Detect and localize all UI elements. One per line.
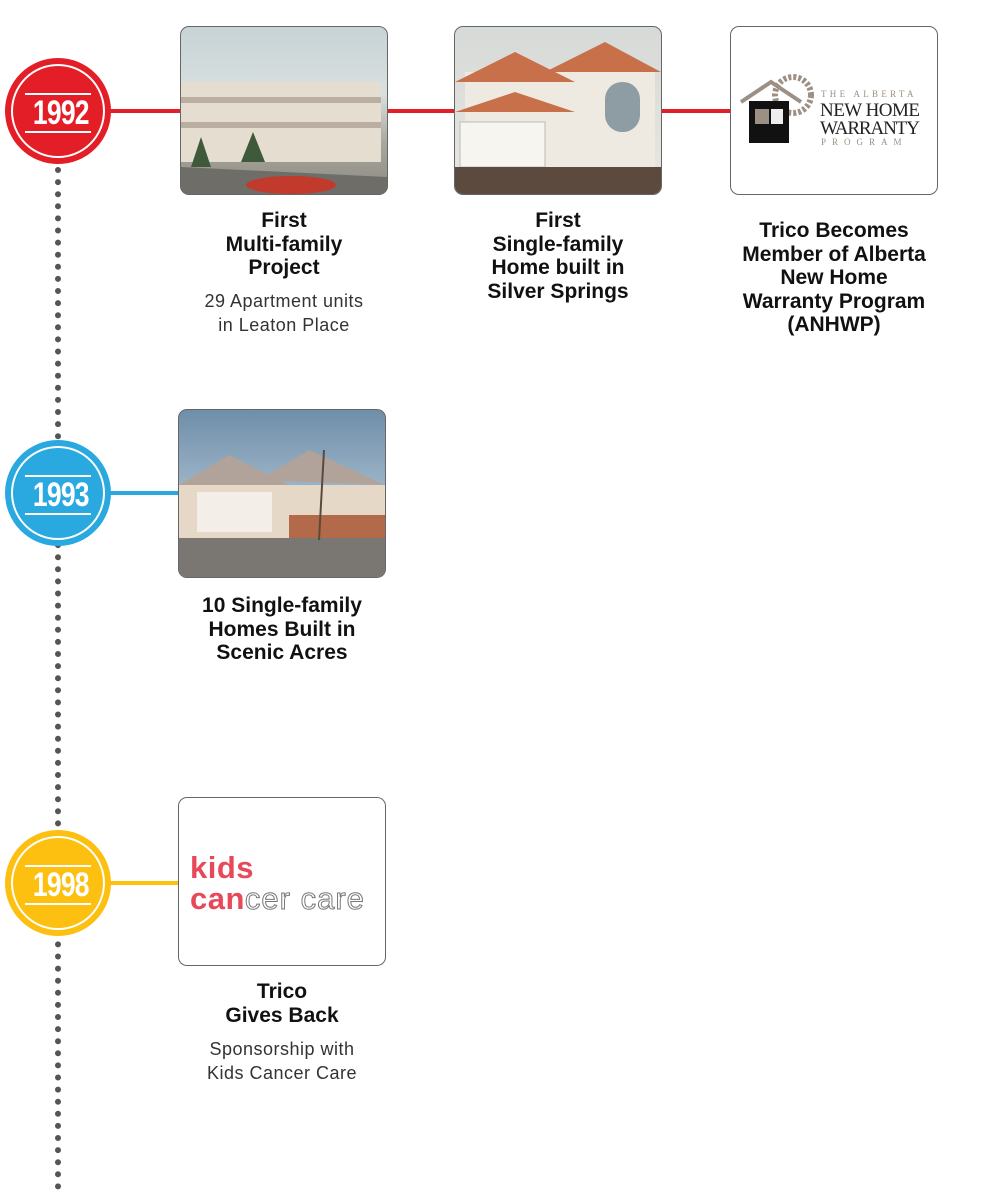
text: first single-family home [487,209,629,302]
text: 10 single-family homes: Homes Built in [208,618,356,640]
year badge 1993 [5,440,111,546]
text: ANHWP: New Home [780,266,888,289]
logo: kids cancer care [178,797,386,966]
logo: kids cancer care: cancer care [190,881,365,916]
text: first single-family home: First [535,209,581,232]
year badge 1998: 1998 [33,866,89,904]
text: 10 single-family homes: Scenic Acres [216,641,348,664]
logo: Alberta New Home Warranty Program [730,26,938,195]
connector 1992 [110,109,730,113]
text: ANHWP: Member of Alberta [742,242,926,266]
year badge 1992 [5,58,111,164]
logo: kids cancer care: kids [190,850,254,885]
text: Trico gives back: Trico [257,980,307,1003]
subtext: sponsorship: Kids Cancer Care [207,1063,357,1083]
text: first single-family home: Silver Springs [487,280,629,302]
year badge 1993: 1993 [33,476,89,514]
logo: Alberta New Home Warranty Program: NEW HOME [820,100,920,121]
text: Trico gives back [225,980,339,1026]
year badge 1998 [5,830,111,936]
text: first multi-family project: First [261,209,307,232]
subtext: 29 apartment units: in Leaton Place [218,315,350,335]
text: first multi-family project: Project [248,256,320,279]
subtext: 29 apartment units [204,291,364,335]
text: 10 single-family homes: 10 Single-family [202,594,362,617]
text: ANHWP: Warranty Program [743,290,925,312]
text: first single-family home: Single-family [493,232,623,256]
subtext: sponsorship: Sponsorship with [209,1039,355,1059]
text: first multi-family project: Multi-family [226,232,342,256]
subtext: 29 apartment units: 29 Apartment units [204,291,364,311]
photo: Scenic Acres home [178,409,386,578]
logo: Alberta New Home Warranty Program: WARRANTY [820,118,920,139]
year badge 1992: 1992 [33,94,89,132]
photo: single-family home [454,26,662,195]
text: Trico gives back: Gives Back [225,1004,339,1026]
text: ANHWP [742,219,926,336]
text: ANHWP: (ANHWP) [787,313,881,336]
timeline dotted line [55,167,61,1190]
logo: Alberta New Home Warranty Program: THE ALBERTA [821,89,917,99]
text: first single-family home: Home built in [492,256,624,279]
photo: apartments [180,26,388,195]
text: ANHWP: Trico Becomes [759,219,909,242]
connector 1998 [110,881,180,885]
text: 10 single-family homes [202,594,362,664]
connector 1993 [110,491,180,495]
logo: Alberta New Home Warranty Program: PROGRAM [821,137,908,147]
subtext: sponsorship [207,1039,357,1083]
text: first multi-family project [226,209,342,279]
